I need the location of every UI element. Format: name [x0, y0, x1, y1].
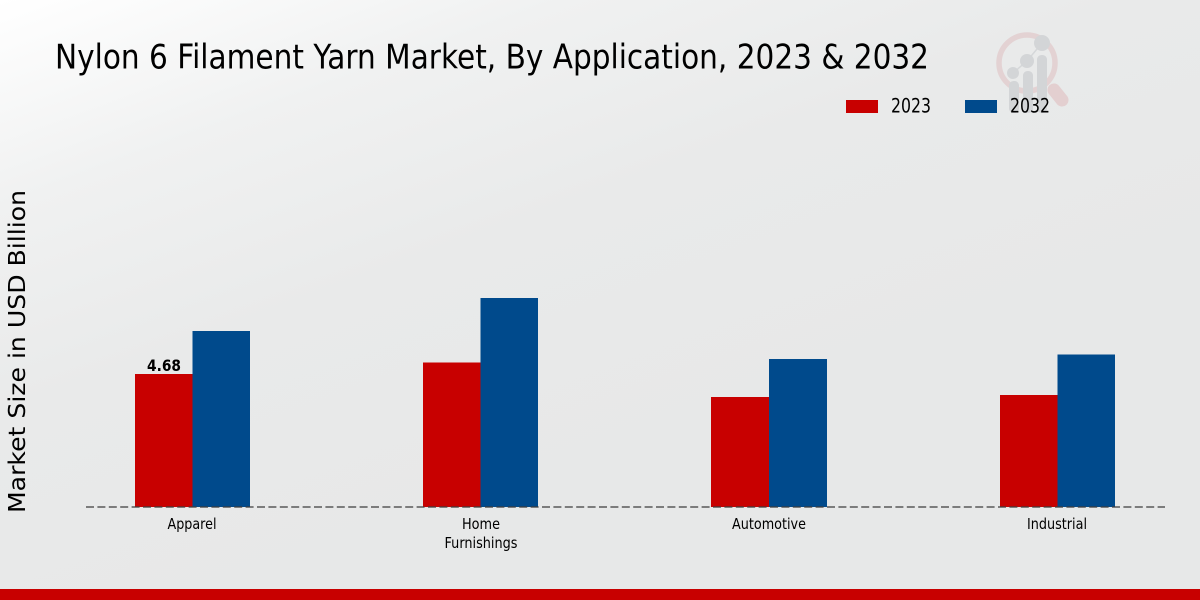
legend item: 2032 — [965, 94, 1050, 118]
bars: Home Furnishings — [423, 298, 538, 507]
label: Home Furnishings — [444, 515, 518, 552]
bars: Industrial — [1000, 354, 1115, 507]
bars: Automotive — [711, 359, 827, 507]
baseline — [86, 506, 1165, 508]
y axis title: Market Size in USD Billion — [3, 190, 31, 513]
legend item: 2032: 2032 — [1010, 94, 1050, 118]
title: Nylon 6 Filament Yarn Market, By Application, 2023 & 2032 — [55, 38, 929, 76]
label: Apparel: Apparel — [168, 515, 216, 533]
x axis labels — [168, 515, 1087, 552]
label: Automotive: Automotive — [732, 515, 806, 533]
footer band — [0, 589, 1200, 600]
legend item: 2023 — [846, 94, 931, 118]
bar chart — [86, 298, 1165, 507]
icon: watermark logo — [999, 35, 1062, 113]
value label: 4.68: 4.68 — [147, 356, 181, 375]
legend item: 2023: 2023 — [891, 94, 931, 118]
label: Home Furnishings: Home — [462, 515, 500, 533]
label: Industrial: Industrial — [1027, 515, 1087, 533]
bars: Apparel — [135, 331, 250, 507]
legend — [846, 94, 1050, 118]
label: Home Furnishings: Furnishings — [444, 534, 518, 552]
